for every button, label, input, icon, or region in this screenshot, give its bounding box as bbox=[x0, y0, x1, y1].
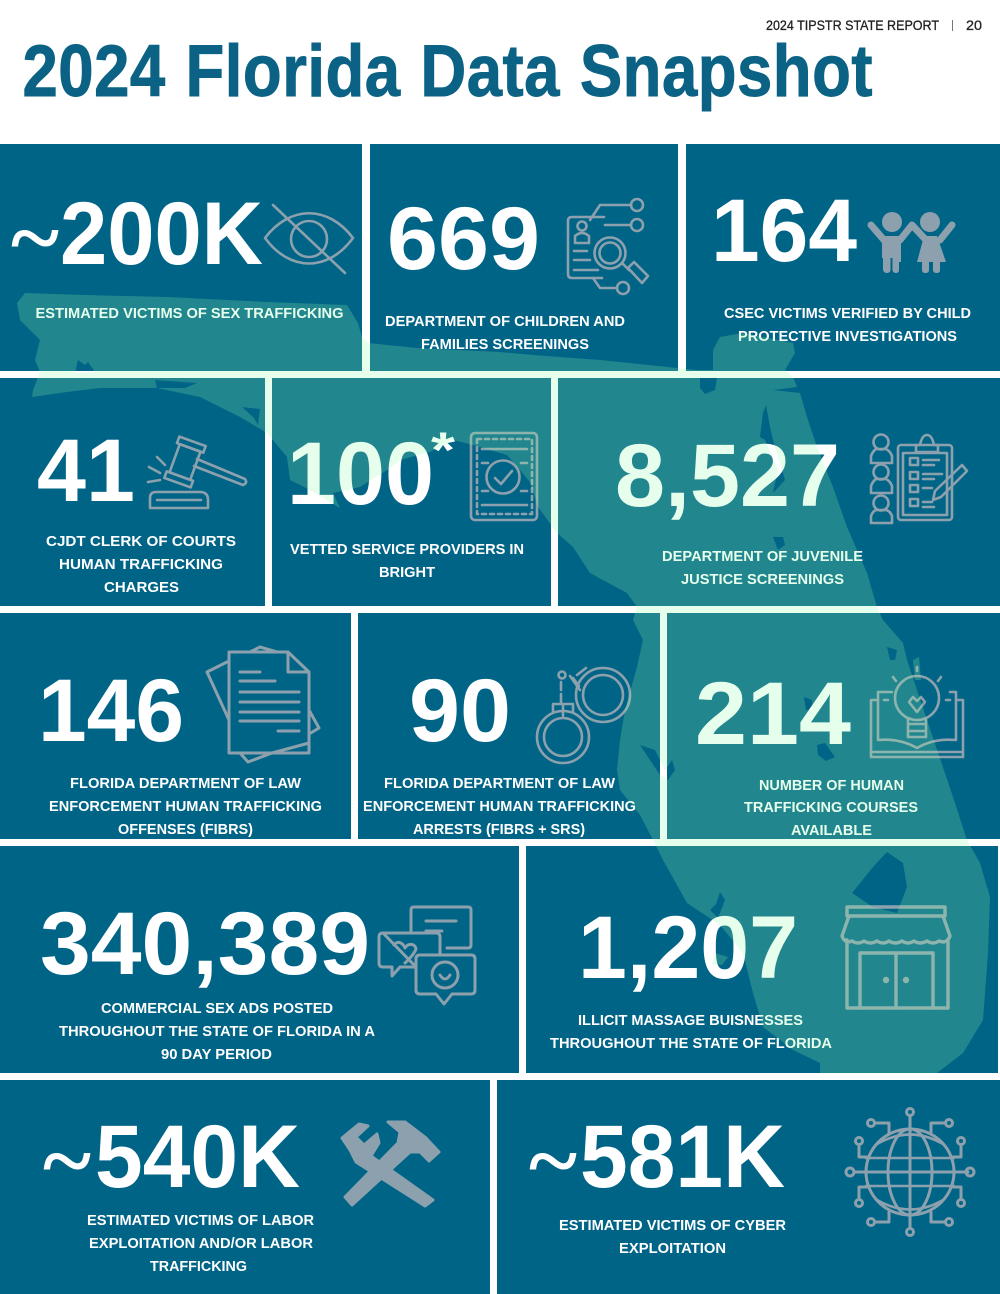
stat: 100*: 100 bbox=[287, 423, 434, 523]
stat: 41: 41 bbox=[37, 420, 135, 520]
label bbox=[49, 776, 322, 838]
icon: handcuffs bbox=[537, 668, 630, 763]
stat: 90: 90 bbox=[409, 660, 511, 760]
label bbox=[290, 542, 524, 581]
panel: FDLE offenses bbox=[0, 613, 351, 839]
stat: 340,389: 340,389 bbox=[40, 893, 370, 993]
stat: ~200K: 200K bbox=[60, 183, 263, 283]
label bbox=[363, 776, 636, 838]
label: EXPLOITATION bbox=[619, 1241, 726, 1257]
label: AVAILABLE bbox=[791, 823, 872, 839]
stat: 214: 214 bbox=[695, 663, 852, 763]
page header: 20 bbox=[966, 17, 982, 33]
label: ESTIMATED VICTIMS OF CYBER bbox=[559, 1218, 787, 1234]
label: FLORIDA DEPARTMENT OF LAW bbox=[70, 776, 301, 792]
icon: wrench and hammer bbox=[342, 1122, 439, 1206]
label: COMMERCIAL SEX ADS POSTED bbox=[101, 1001, 333, 1017]
label: CHARGES bbox=[104, 580, 179, 596]
label: DEPARTMENT OF CHILDREN AND bbox=[385, 314, 625, 330]
label: HUMAN TRAFFICKING bbox=[59, 557, 223, 573]
icon: crossed eye bbox=[265, 205, 353, 273]
label: JUSTICE SCREENINGS bbox=[681, 572, 844, 588]
label: DEPARTMENT OF JUVENILE bbox=[662, 549, 863, 565]
label: CSEC VICTIMS VERIFIED BY CHILD bbox=[724, 306, 971, 322]
stat: ~540K: ~ bbox=[43, 1113, 91, 1210]
label bbox=[744, 778, 918, 839]
panel: CSEC victims bbox=[686, 144, 1000, 371]
icon: certificate with check bbox=[471, 433, 537, 520]
label: ARRESTS (FIBRS + SRS) bbox=[413, 822, 585, 838]
panel: CJDT clerk of courts bbox=[0, 378, 265, 606]
icon: storefront bbox=[842, 907, 950, 1008]
stat: 164: 164 bbox=[711, 180, 857, 280]
label: THROUGHOUT THE STATE OF FLORIDA IN A bbox=[59, 1024, 376, 1040]
panel: DCF screenings bbox=[370, 144, 678, 371]
stat: ~581K: ~ bbox=[529, 1113, 577, 1210]
label bbox=[724, 306, 971, 345]
stat: 8,527: 8,527 bbox=[615, 425, 840, 525]
label bbox=[59, 1001, 376, 1063]
label: ENFORCEMENT HUMAN TRAFFICKING bbox=[363, 799, 636, 815]
panel: FDLE arrests bbox=[358, 613, 660, 839]
label: BRIGHT bbox=[379, 565, 435, 581]
label: ESTIMATED VICTIMS OF SEX TRAFFICKING bbox=[36, 306, 344, 322]
icon: two children holding hands bbox=[871, 212, 952, 273]
label bbox=[385, 314, 625, 353]
stat: 669: 669 bbox=[387, 188, 540, 288]
stat: 146: 146 bbox=[38, 660, 184, 760]
panel: juvenile justice screenings bbox=[558, 378, 1000, 606]
panel: human trafficking courses bbox=[667, 613, 1000, 839]
panel: vetted service providers bbox=[272, 378, 551, 606]
label: ILLICIT MASSAGE BUISNESSES bbox=[578, 1013, 803, 1029]
page header: 2024 TIPSTR STATE REPORT bbox=[766, 17, 939, 33]
label bbox=[662, 549, 863, 588]
title: 2024 Florida Data Snapshot bbox=[22, 31, 872, 112]
icon: gavel bbox=[148, 437, 246, 508]
label: VETTED SERVICE PROVIDERS IN bbox=[290, 542, 524, 558]
label: ESTIMATED VICTIMS OF LABOR bbox=[87, 1213, 315, 1229]
stat: ~581K: 581K bbox=[580, 1106, 785, 1206]
label bbox=[559, 1218, 787, 1257]
label: EXPLOITATION AND/OR LABOR bbox=[89, 1236, 314, 1252]
panel: illicit massage businesses bbox=[526, 846, 998, 1073]
map: Florida silhouette overlay bbox=[17, 293, 990, 1073]
label: FAMILIES SCREENINGS bbox=[421, 337, 589, 353]
stat: 1,207: 1,207 bbox=[578, 897, 798, 997]
label: THROUGHOUT THE STATE OF FLORIDA bbox=[550, 1036, 833, 1052]
label bbox=[550, 1013, 833, 1052]
stat: ~200K: ~ bbox=[11, 190, 59, 287]
icon: book and light bulb bbox=[871, 667, 963, 757]
label: OFFENSES (FIBRS) bbox=[118, 822, 253, 838]
panel: labor exploitation bbox=[0, 1080, 490, 1294]
label: 90 DAY PERIOD bbox=[161, 1047, 272, 1063]
icon: network globe bbox=[846, 1108, 974, 1236]
icon: chat bubbles bbox=[379, 907, 475, 1004]
label: PROTECTIVE INVESTIGATIONS bbox=[738, 329, 957, 345]
label: ENFORCEMENT HUMAN TRAFFICKING bbox=[49, 799, 322, 815]
stat: ~540K: 540K bbox=[95, 1106, 300, 1206]
panel: estimated victims of sex trafficking bbox=[0, 144, 362, 371]
label: NUMBER OF HUMAN bbox=[759, 778, 904, 794]
panel: cyber exploitation bbox=[497, 1080, 1000, 1294]
label: TRAFFICKING COURSES bbox=[744, 800, 918, 816]
panel: commercial sex ads bbox=[0, 846, 519, 1073]
label: FLORIDA DEPARTMENT OF LAW bbox=[384, 776, 615, 792]
label: CJDT CLERK OF COURTS bbox=[46, 534, 236, 550]
icon: document search network bbox=[568, 199, 648, 294]
label: TRAFFICKING bbox=[150, 1259, 247, 1275]
label bbox=[46, 534, 236, 596]
icon: stack of papers bbox=[207, 647, 319, 762]
icon: people and clipboard bbox=[871, 434, 967, 523]
stat: 100*: * bbox=[431, 422, 456, 478]
label bbox=[87, 1213, 315, 1275]
